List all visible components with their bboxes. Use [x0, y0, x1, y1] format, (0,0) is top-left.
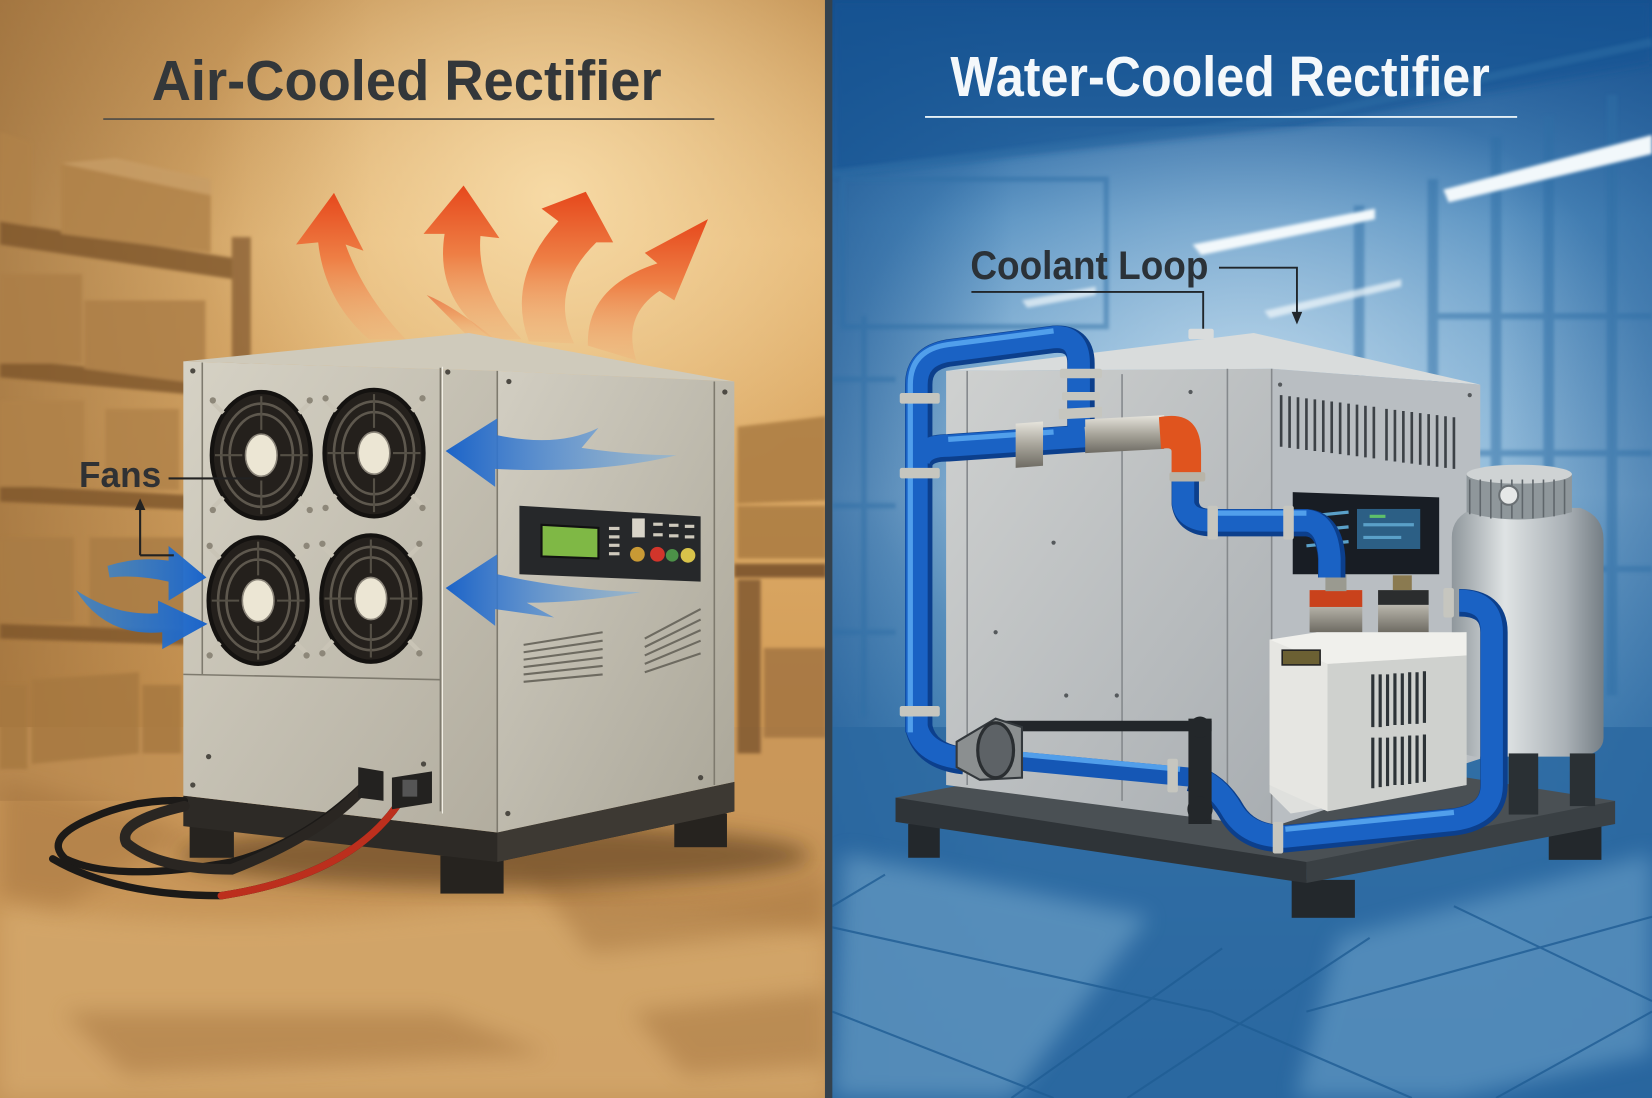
- icon: fan bottom right: [319, 535, 422, 662]
- title underline: [103, 118, 714, 120]
- panel divider: [825, 0, 833, 1098]
- unit side face: [497, 371, 734, 832]
- pipe highlights: [910, 331, 1454, 829]
- shadow under unit: [179, 824, 811, 887]
- chiller module: [1270, 632, 1467, 813]
- warehouse background: [0, 0, 826, 1098]
- title: Air-Cooled Rectifier: Air-Cooled Rectifier: [152, 49, 662, 113]
- coolant piping: [910, 331, 1494, 839]
- icon: fan top left: [210, 392, 313, 518]
- icon: hot air arrows rising: [296, 185, 708, 360]
- copper and steel fittings: [900, 369, 1454, 854]
- cable connectors: [358, 767, 432, 809]
- pump at base of loop: [957, 717, 1213, 824]
- air-cooled rectifier unit: [183, 333, 734, 894]
- label: Fans: [81, 462, 238, 556]
- unit front face: [946, 369, 1272, 827]
- panel: water-cooled rectifier: [832, 0, 1652, 1098]
- unit front face: [183, 361, 497, 832]
- thin pipe from pump: [1017, 761, 1196, 778]
- title: Water-Cooled Rectifier: Water-Cooled Rectifier: [950, 45, 1490, 109]
- panel: air-cooled rectifier: [0, 0, 826, 1098]
- title underline: [925, 116, 1517, 118]
- unit base: [183, 782, 734, 862]
- side vent grille: [1281, 395, 1454, 469]
- control panel: [519, 506, 701, 582]
- display screen: [1293, 492, 1439, 574]
- reflective floor: [832, 727, 1652, 1098]
- coolant tank: [1452, 465, 1604, 815]
- ceiling lights: [1022, 135, 1652, 318]
- platform: [896, 738, 1615, 918]
- icon: fan top right: [322, 390, 426, 516]
- main coolant loop pipes: [917, 337, 1492, 837]
- unit top: [946, 333, 1480, 385]
- vents: [524, 609, 701, 682]
- icon: cool air arrows into side: [446, 418, 676, 626]
- icon: intake air arrows into fans: [76, 546, 208, 649]
- factory background: [832, 0, 1652, 1098]
- water-cooled rectifier unit: [946, 329, 1480, 827]
- power cables: [53, 782, 406, 896]
- unit top: [183, 333, 734, 381]
- pump fittings: [1310, 574, 1429, 632]
- icon: fan bottom left: [206, 537, 310, 664]
- top cap: [1188, 329, 1214, 339]
- label: Coolant Loop: [970, 244, 1302, 332]
- unit feet: [190, 813, 727, 894]
- pipe dark edges: [919, 339, 1494, 839]
- label: Coolant Loop: Coolant Loop: [970, 244, 1208, 288]
- unit side face: [1272, 369, 1480, 827]
- label: Fans: Fans: [79, 455, 161, 495]
